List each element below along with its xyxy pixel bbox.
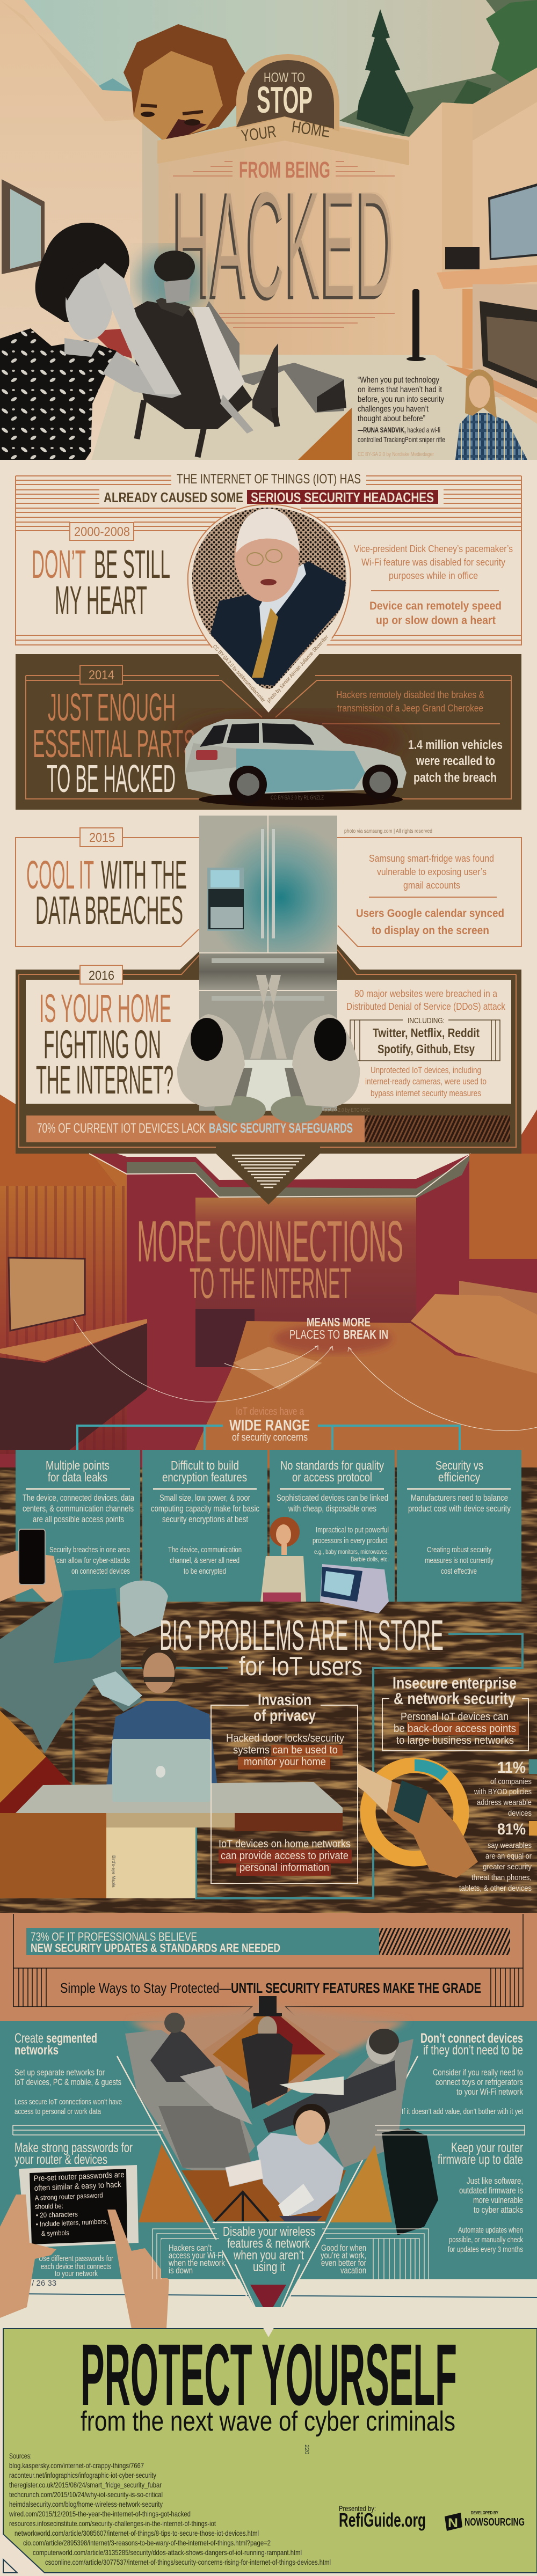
title: home: HOME (291, 117, 331, 141)
tablet: should be: (35, 2202, 63, 2211)
pacemaker facts: purposes while in office (389, 570, 478, 581)
stat bar: 73%: NEW SECURITY UPDATES & STANDARDS ARE NEEDED (31, 1941, 280, 1955)
section: big problems (0, 1581, 537, 1898)
card 3: Sophisticated devices can be linked (277, 1493, 388, 1503)
presented by: Presented by: (339, 2504, 376, 2513)
including box: INCLUDING: (408, 1016, 445, 1025)
panel: invasion of privacy: can provide access to private (221, 1850, 349, 1862)
sources: csoonline.com/article/3077537/internet-of-things/security-concerns-rising-for-internet-of-things-devices.html (45, 2558, 331, 2566)
callout: more places to break in: MEANS MORE (307, 1315, 371, 1329)
woman reading (263, 2029, 413, 2168)
fridge facts: vulnerable to exposing user’s (377, 867, 487, 877)
man in armchair (125, 2013, 255, 2178)
bedroom background (0, 1095, 537, 1467)
tip: disable wireless: using it (253, 2260, 285, 2274)
bed (187, 1281, 537, 1467)
section: IoT headaches: ESSENTIAL PARTS (33, 723, 195, 766)
stat: 11% (474, 1759, 537, 1818)
tablet: & symbols (41, 2229, 69, 2237)
card 1: on connected devices (71, 1567, 130, 1576)
stripe frame (16, 476, 521, 645)
wood floor and book (0, 1813, 343, 1898)
callout: more places to break in: BREAK IN (343, 1327, 388, 1341)
panel: invasion of privacy: Invasion (258, 1691, 311, 1709)
tip: create segmented networks (14, 2031, 122, 2116)
floor (91, 354, 537, 460)
stat bar: 70%: CC BY-2.0 by ETC-USC (324, 1107, 370, 1113)
tip: disable wireless: features & network (227, 2236, 310, 2251)
card 3: Barbie dolls, etc. (351, 1555, 389, 1563)
tip: keep firmware up to date (438, 2140, 523, 2254)
year tag 2014 (80, 665, 122, 684)
panel: invasion of privacy (211, 1691, 358, 1883)
card 3: e.g., baby monitors, microwaves, (314, 1548, 389, 1555)
stamped number: 220 (303, 2445, 310, 2454)
tip: create segmented networks: Less secure IoT connections won’t have (14, 2097, 122, 2107)
heading: just enough essential parts to be hacked (33, 686, 195, 801)
panel: insecure enterprise: be back-door access points (394, 1723, 516, 1735)
stat bar: 70%: BASIC SECURITY SAFEGUARDS (209, 1121, 353, 1136)
right painting (469, 1154, 537, 1259)
tablet: often similar & easy to hack (34, 2180, 121, 2193)
expert quote: CC BY-SA 2.0 by Nordiske Mediedager (358, 451, 434, 458)
wide range heading: IoT devices have a (236, 1406, 304, 1418)
section: footer (3, 2307, 537, 2573)
photo credit right: photo by Senior Airman Julianne Showalter (266, 634, 330, 704)
stat: 81%: greater security (483, 1862, 532, 1872)
man with top hat (242, 1996, 293, 2109)
stat: 81% (459, 1821, 537, 1893)
jeep facts: transmission of a Jeep Grand Cherokee (337, 703, 483, 714)
stat: 11%: of companies (490, 1777, 532, 1786)
tv and cabinet (0, 1258, 255, 1450)
headline line 1: THE INTERNET OF THINGS (IOT) HAS (177, 472, 361, 487)
jeep illustration: CC BY-SA 2.0 by RL GNZLZ (271, 795, 324, 801)
heading: don't be still my heart: DON’T (32, 542, 86, 586)
panel: insecure enterprise: Personal IoT devices can (401, 1711, 509, 1723)
tablet: • 20 characters (36, 2210, 78, 2219)
corner triangle (3, 2559, 17, 2573)
section: bedroom backdrop (0, 1095, 537, 1467)
arrow tip over paper (251, 2307, 286, 2337)
tip: create segmented networks: access to personal or work data (14, 2107, 101, 2116)
ddos facts: internet-ready cameras, were used to (365, 1076, 487, 1087)
card 1 (16, 1450, 140, 1602)
presented by: RefiGuide.org (339, 2509, 426, 2531)
jeep facts: 1.4 million vehicles (408, 738, 503, 752)
section: 2015 / 2016: FIGHTING ON (43, 1022, 161, 1067)
tablet (19, 2165, 139, 2248)
tan band (0, 1913, 537, 2023)
section: IoT headaches (16, 472, 521, 810)
pacemaker facts: Wi-Fi feature was disabled for security (361, 557, 505, 568)
anxious woman (0, 223, 182, 460)
brown panel: 2014 (16, 654, 521, 810)
card 3: or access protocol (292, 1470, 372, 1484)
card 2 (142, 1450, 267, 1602)
fridge facts: to display on the screen (372, 924, 489, 937)
tip: disable wireless: even better for (321, 2258, 366, 2268)
heading: more connections to the internet (137, 1209, 403, 1307)
barbie doll (260, 1517, 306, 1602)
card 1: Security breaches in one area (49, 1545, 130, 1554)
stat bar: 73% (26, 1928, 510, 1955)
pacemaker facts: up or slow down a heart (376, 614, 496, 627)
panel outline (213, 2222, 325, 2337)
panel: invasion of privacy: systems can be used to (233, 1744, 338, 1756)
expert quote: before, you run into security (358, 395, 444, 404)
pacemaker facts: Vice-president Dick Cheney’s pacemaker’s (354, 544, 513, 554)
panel: invasion of privacy: personal information (240, 1862, 329, 1874)
card 1: are all possible access points (33, 1514, 124, 1524)
side wall wedge (0, 1095, 117, 1186)
tip: disable wireless: when the network (168, 2258, 225, 2268)
hands on tablet (0, 2195, 169, 2329)
heading: just enough essential parts to be hacked: TO BE HACKED (47, 758, 176, 801)
year tag 2015 (80, 828, 122, 847)
connector lines (77, 1426, 460, 1450)
section: security concerns cards (0, 1450, 521, 1613)
including box: Spotify, Github, Etsy (378, 1042, 475, 1056)
cream paper (0, 2279, 537, 2330)
year tag 2014: 2014 (89, 668, 114, 682)
tip: create segmented networks: Set up separate networks for (14, 2067, 105, 2078)
fridge facts: photo via samsung.com | All rights reserved (344, 828, 432, 834)
heading: just enough essential parts to be hacked: JUST ENOUGH (48, 686, 176, 729)
title: stop: STOP (257, 79, 313, 121)
section heading: Simple Ways to Stay Protected— (60, 1980, 231, 1996)
green paper panel (3, 2329, 537, 2573)
heading: cool it with the data breaches (26, 853, 187, 933)
tip: keep firmware up to date: more vulnerable (473, 2195, 523, 2205)
tip: keep firmware up to date: to cyber attacks (474, 2205, 523, 2215)
big man's face (124, 24, 285, 151)
wide range heading: WIDE RANGE (229, 1417, 310, 1434)
red triangle tip (250, 2285, 286, 2316)
card 3: with cheap, disposable ones (288, 1503, 376, 1514)
sources: Sources: (9, 2452, 32, 2460)
ddos facts: bypass internet security measures (371, 1088, 481, 1098)
sources: heimdalsecurity.com/blog/home-wireless-network-security (9, 2500, 163, 2508)
tip: strong passwords: each device that connects (41, 2262, 111, 2271)
fridge facts: gmail accounts (403, 880, 460, 891)
ddos facts (346, 988, 506, 1098)
tip: strong passwords: to your network (55, 2269, 98, 2278)
expert quote: on items that haven’t had it (358, 385, 442, 394)
card 2: to be encrypted (184, 1567, 226, 1576)
tip: disable wireless: Good for when (321, 2243, 366, 2253)
panel: invasion of privacy: monitor your home (244, 1756, 326, 1768)
expert quote: challenges you haven’t (358, 405, 429, 414)
pacemaker facts: Device can remotely speed (369, 600, 502, 612)
baby monitor (320, 1564, 389, 1613)
ddos facts: 80 major websites were breached in a (354, 988, 498, 999)
panel down-pointing chevron (216, 1154, 320, 1205)
right side wedge (521, 1110, 537, 1154)
year tag 2000-2008: 2000-2008 (74, 525, 130, 539)
stat bar: 70%: 70% OF CURRENT IOT DEVICES LACK (37, 1121, 206, 1136)
card 2: Difficult to build (171, 1458, 239, 1472)
tip dividers (13, 2125, 525, 2135)
photo credit left: CC BY-SA 2.0 by soldiersmediacenter (212, 644, 266, 703)
tip: strong passwords: your router & devices (14, 2152, 107, 2167)
stat bar: 70% (26, 1107, 510, 1142)
card 3: processors in every product: (313, 1536, 389, 1545)
presented by (339, 2504, 426, 2531)
card 4: Security vs (436, 1458, 483, 1472)
tip: disable wireless: is down (169, 2265, 193, 2276)
title: from being: FROM BEING (239, 157, 330, 183)
tip: disable wireless: you’re at work, (321, 2250, 366, 2261)
panel: invasion of privacy: of privacy (253, 1707, 316, 1724)
tablet: Pre-set router passwords are (33, 2170, 125, 2183)
heading: don't be still my heart: MY HEART (55, 578, 147, 622)
wood diamond (197, 2006, 340, 2106)
black frame (13, 1914, 523, 2106)
card 4: Creating robust security (427, 1545, 491, 1554)
card 2: The device, communication (168, 1545, 242, 1554)
jeep facts: were recalled to (416, 754, 495, 768)
fridge facts (344, 828, 504, 937)
hero section (0, 0, 537, 460)
tip: create segmented networks: IoT devices, PC & mobile, & guests (14, 2077, 121, 2087)
title: how to: HOW TO (264, 70, 305, 85)
jeep facts: Hackers remotely disabled the brakes & (336, 689, 484, 700)
section: 2015 / 2016: THE INTERNET? (36, 1058, 173, 1102)
title arch (236, 54, 339, 145)
section: bedroom more connections (0, 1154, 537, 1467)
tip: disable wireless: access your Wi-Fi (169, 2250, 223, 2261)
fridge (199, 816, 337, 1111)
tip: disable wireless (153, 2225, 429, 2279)
fireplace wall furniture (407, 184, 537, 413)
section: 2015 / 2016: IS YOUR HOME (39, 986, 171, 1031)
sources: networkworld.com/article/3085607/internet-of-things/8-tips-to-secure-those-iot-devices.html (14, 2529, 259, 2537)
title: from being (173, 157, 395, 183)
headline line 2: ALREADY CAUSED SOME (104, 489, 243, 505)
tip: strong passwords: Make strong passwords for (14, 2140, 133, 2155)
card 4: Manufacturers need to balance (411, 1493, 508, 1503)
2016 brown frame (16, 944, 521, 1154)
man with laptop (106, 1645, 217, 1786)
jeep facts: patch the breach (413, 770, 497, 785)
tip: disable wireless: Hackers can’t (169, 2243, 212, 2253)
title: hacked (171, 159, 395, 331)
sources: computerworld.com/article/3135285/security/ddos-attack-shows-dangers-of-iot-running-rampant.html (33, 2548, 302, 2557)
sources (9, 2452, 331, 2566)
wood triangles (139, 2144, 392, 2222)
stat bar: 73%: 73% OF IT PROFESSIONALS BELIEVE (31, 1930, 197, 1943)
card 1: The device, connected devices, data (23, 1493, 134, 1503)
center wall glow (195, 1198, 416, 1363)
sources: cio.com/article/2895398/internet/3-reasons-to-be-wary-of-the-internet-of-things.html?page=2 (23, 2538, 271, 2547)
including box (350, 1016, 500, 1061)
expert quote: “When you put technology (358, 376, 439, 385)
expert quote: controlled TrackingPoint sniper rifle (358, 435, 445, 444)
section: bark background (0, 1467, 537, 1913)
doctor with stethoscope (0, 1581, 168, 1753)
left wall picture (2, 179, 45, 274)
card 2: Small size, low power, & poor (159, 1493, 250, 1503)
card 2: security encryptions at best (162, 1514, 248, 1524)
section heading (60, 1980, 481, 1996)
card 4: measures is not currently (425, 1556, 494, 1565)
wood floor and book: Bird’s-eye Maple. (111, 1855, 116, 1889)
callout: more places to break in (289, 1315, 388, 1341)
curtains (0, 1154, 127, 1454)
card 3: No standards for quality (280, 1458, 384, 1472)
fridge facts: Users Google calendar synced (356, 907, 504, 920)
expert quote: thought about before” (358, 414, 425, 423)
card 1: Multiple points (46, 1458, 110, 1472)
cream paper: 691 / 26 33 (16, 2279, 56, 2288)
card 1: for data leaks (48, 1470, 107, 1484)
tip: disable wireless: Disable your wireless (223, 2225, 315, 2239)
ceiling line (89, 1154, 471, 1197)
wood floor triangle (298, 408, 352, 460)
heading: big problems are in store (159, 1611, 444, 1681)
tip: strong passwords: Use different passwords for (39, 2254, 113, 2263)
fridge facts: Samsung smart-fridge was found (369, 853, 494, 864)
card 2: computing capacity make for basic (151, 1503, 259, 1514)
tip: disable wireless: when you aren’t (233, 2248, 304, 2263)
tip: strong passwords (14, 2140, 139, 2278)
card 4: cost effective (441, 1567, 477, 1576)
sources: wired.com/2015/12/2015-the-year-the-internet-of-things-got-hacked (9, 2509, 191, 2518)
jeep illustration (177, 714, 407, 807)
section: 2015 / 2016: DATA BREACHES (35, 888, 183, 933)
2015 frame (16, 838, 521, 946)
teal background (0, 2021, 537, 2279)
sources: blog.kaspersky.com/internet-of-crappy-things/7667 (9, 2461, 144, 2470)
section: tips panel (0, 1996, 537, 2337)
pacemaker facts (354, 544, 513, 627)
man in chair (125, 251, 346, 457)
jeep facts (322, 689, 503, 785)
callout: more places to break in: PLACES TO (289, 1327, 340, 1341)
sources: raconteur.net/infographics/infographic-iot-cyber-security (9, 2471, 156, 2479)
sources: resources.infosecinstitute.com/security-challenges-in-the-internet-of-things-iot (9, 2519, 216, 2528)
expert quote: —RUNA SANDVIK, hacked a wi-fi (358, 425, 440, 434)
tan glow behind figures (129, 2007, 408, 2055)
wood diamond (0, 1711, 72, 1823)
heading: don't be still my heart (32, 542, 170, 622)
stat: 11%: devices (508, 1809, 532, 1818)
card 2: encryption features (162, 1470, 247, 1484)
card 1: centers, & communication channels (23, 1503, 134, 1514)
tip: create segmented networks: Create segmented (14, 2031, 97, 2046)
sky and trees (0, 0, 537, 161)
title: your: YOUR (240, 122, 277, 145)
nowsourcing logo: DEVELOPED BY (471, 2511, 499, 2515)
panel: insecure enterprise (382, 1674, 528, 1751)
donut chart with smartwatch (358, 1764, 478, 1878)
heading: is your home fighting on the internet (36, 986, 173, 1102)
nowsourcing logo (445, 2511, 525, 2531)
ddos facts: Distributed Denial of Service (DDoS) attack (346, 1001, 506, 1012)
tip: don't connect devices (402, 2031, 524, 2116)
sources: theregister.co.uk/2015/08/24/smart_fridge_security_fubar (9, 2480, 162, 2489)
card 4: efficiency (438, 1470, 480, 1484)
stat: 81%: 81% (497, 1821, 526, 1838)
year tag 2016: 2016 (89, 968, 114, 983)
red pillow (91, 328, 132, 358)
arrows to callout (74, 1319, 537, 1431)
panel: invasion of privacy: IoT devices on home networks (219, 1838, 351, 1850)
teal mask below wood (209, 2222, 329, 2334)
card 4: product cost with device security (408, 1503, 511, 1514)
stat: 11%: 11% (497, 1759, 526, 1777)
child with camera (215, 2104, 344, 2221)
year tag 2015: 2015 (89, 831, 115, 845)
panel: insecure enterprise: to large business networks (396, 1735, 514, 1746)
section: 2015 / 2016 (16, 816, 521, 1154)
heading: cool it with the data breaches: COOL IT (26, 853, 94, 897)
heading: big problems are in store: for IoT users (239, 1652, 362, 1681)
wide range heading: of security concerns (232, 1432, 308, 1443)
tablet: • Include letters, numbers, (35, 2217, 108, 2228)
triangle cream borders (117, 2056, 418, 2337)
tip: disable wireless: vacation (340, 2265, 366, 2276)
section: 2015 / 2016: WITH THE (101, 853, 187, 897)
card 3: Impractical to put powerful (316, 1525, 389, 1535)
panel frame (26, 676, 511, 799)
panel: invasion of privacy: Hacked door locks/security (226, 1733, 344, 1744)
heading: protect yourself: from the next wave of cyber criminals (81, 2406, 455, 2437)
card 4 (397, 1450, 521, 1602)
router (382, 2129, 438, 2235)
teal frame lines (74, 1634, 523, 1898)
card 1: can allow for cyber-attacks (56, 1556, 130, 1565)
tablet: A strong router password (34, 2191, 103, 2202)
sources: techcrunch.com/2015/10/24/why-iot-security-is-so-critical (9, 2490, 163, 2499)
crossed security cameras (177, 975, 360, 1123)
section: IoT headaches: BE STILL (94, 542, 170, 586)
including box: Twitter, Netflix, Reddit (373, 1026, 480, 1040)
expert quote (358, 376, 445, 458)
ddos facts: Unprotected IoT devices, including (371, 1065, 481, 1075)
room walls (0, 0, 537, 460)
card 2: channel, & server all need (170, 1556, 240, 1565)
section: simple ways (0, 1913, 537, 2106)
tip: create segmented networks: networks (14, 2043, 59, 2058)
nowsourcing logo: N (448, 2516, 458, 2530)
quoted expert (455, 369, 527, 460)
hand holding phone (0, 1529, 63, 1602)
map pin with portrait (183, 499, 354, 713)
red highlight headline: SERIOUS SECURITY HEADACHES (251, 489, 434, 505)
ceiling trim (117, 1154, 473, 1198)
desk (16, 1782, 343, 1813)
year tag 2016 (80, 965, 122, 984)
card 3 (270, 1450, 395, 1602)
wide range heading (229, 1406, 310, 1443)
laptop (112, 1739, 211, 1802)
